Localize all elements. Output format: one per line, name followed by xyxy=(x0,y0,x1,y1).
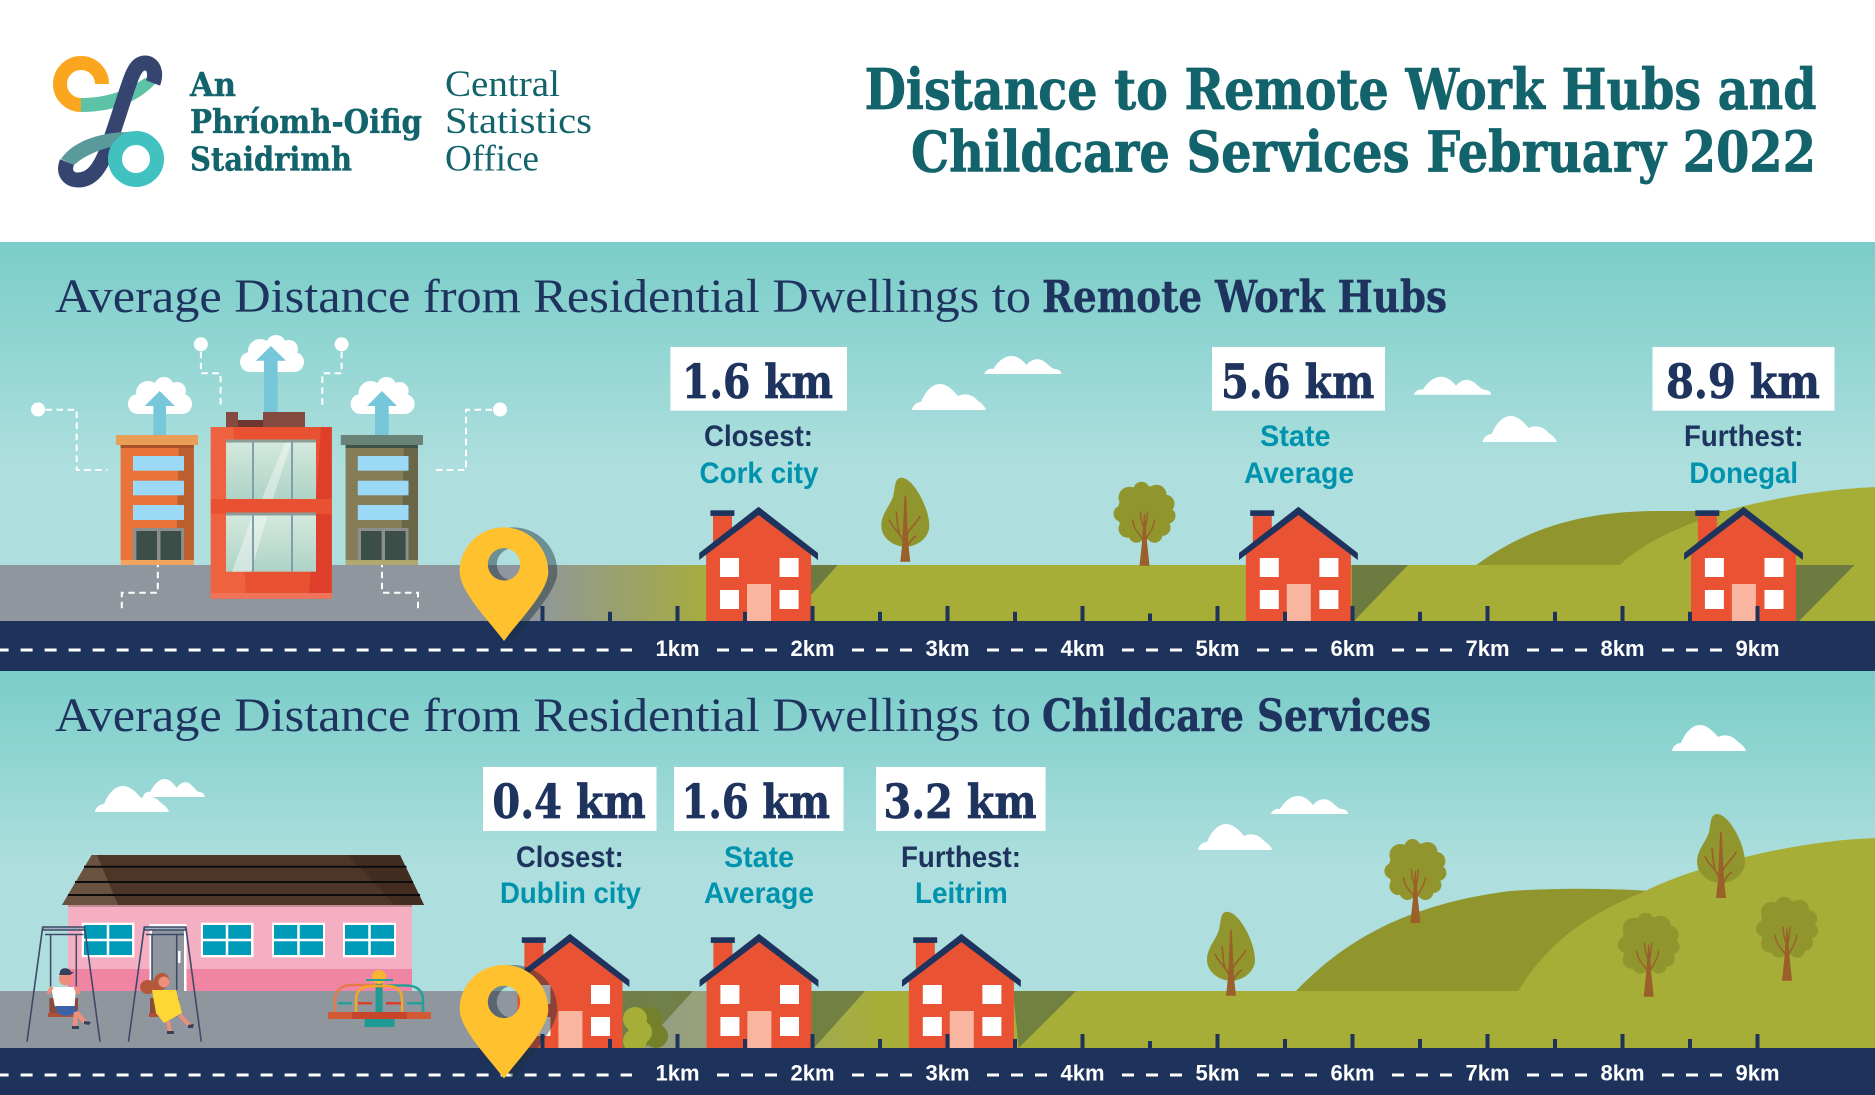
road: 7km xyxy=(1465,1060,1510,1086)
house: furthest, Leitrim xyxy=(902,934,1021,1048)
road: 8km xyxy=(1600,636,1645,661)
callout: 8.9 km furthest: Furthest: xyxy=(1684,420,1804,453)
bush xyxy=(623,1007,668,1053)
hills xyxy=(1475,487,1875,567)
logo text: English name: Statistics xyxy=(445,101,592,142)
road: 6km xyxy=(1330,636,1375,661)
callout: 5.6 km state average: State xyxy=(1260,420,1331,453)
callout: 8.9 km furthest xyxy=(1652,347,1834,490)
sky background xyxy=(0,242,1875,671)
logo text: Irish name xyxy=(189,65,422,179)
road: 5km xyxy=(1195,1060,1240,1086)
clouds xyxy=(95,725,1746,850)
clouds xyxy=(912,356,1557,442)
callout: 1.6 km state average xyxy=(674,767,844,910)
road: 3km xyxy=(925,636,970,661)
road: 1km xyxy=(655,636,700,661)
logo text: Irish name: Phríomh-Oifig xyxy=(190,102,422,141)
logo text: English name: Central xyxy=(445,64,560,105)
childcare building xyxy=(62,855,424,991)
swing with boy xyxy=(27,927,100,1042)
road xyxy=(0,1034,1875,1095)
callout: 1.6 km state average: Average xyxy=(704,877,814,910)
sky background xyxy=(0,671,1875,1095)
house shadows xyxy=(622,991,1076,1048)
panel: remote work hubs xyxy=(0,242,1875,671)
heading: Average Distance from Residential Dwellings to xyxy=(55,689,1031,742)
heading: Remote Work Hubs xyxy=(1042,272,1447,323)
heading xyxy=(55,689,1431,742)
road: 9km xyxy=(1735,1060,1780,1086)
road: 2km xyxy=(790,1060,835,1086)
road: 9km xyxy=(1735,636,1780,661)
house: closest, Dublin city xyxy=(511,934,629,1048)
heading: Childcare Services xyxy=(1042,691,1431,742)
building: olive office xyxy=(341,377,423,565)
road: 3km xyxy=(925,1060,970,1086)
connector lines xyxy=(31,337,507,612)
road: 4km xyxy=(1060,636,1105,661)
callout: 3.2 km furthest: 3.2 km xyxy=(884,775,1036,830)
road: 5km xyxy=(1195,636,1240,661)
callout: 1.6 km closest xyxy=(670,347,847,490)
house: state average xyxy=(1239,507,1358,621)
callout: 5.6 km state average: Average xyxy=(1244,457,1354,490)
callout: 1.6 km closest: Closest: xyxy=(704,420,813,453)
ground xyxy=(0,991,1875,1048)
roundabout xyxy=(328,970,431,1027)
logo text: English name xyxy=(445,64,592,180)
callout: 1.6 km closest: Cork city xyxy=(700,457,819,490)
callout: 1.6 km state average: 1.6 km xyxy=(682,775,830,830)
callout: 0.4 km closest: Closest: xyxy=(516,841,624,874)
logo xyxy=(60,63,592,180)
hills xyxy=(1295,838,1875,992)
road: 4km xyxy=(1060,1060,1105,1086)
map pin xyxy=(460,527,557,641)
heading: Average Distance from Residential Dwellings to xyxy=(55,270,1031,323)
logo text: Irish name: Staidrimh xyxy=(190,140,352,179)
road xyxy=(0,606,1875,671)
callout: 0.4 km closest xyxy=(483,767,656,910)
ground xyxy=(0,565,1875,621)
map pin xyxy=(460,965,557,1079)
house: closest, Cork city xyxy=(699,507,818,621)
road: 2km xyxy=(790,636,835,661)
building: red tower xyxy=(211,335,332,599)
building: orange office xyxy=(116,377,198,565)
callout: 8.9 km furthest: 8.9 km xyxy=(1666,355,1820,410)
callout: 8.9 km furthest: Donegal xyxy=(1689,457,1798,490)
title xyxy=(865,57,1817,186)
road: 6km xyxy=(1330,1060,1375,1086)
callout: 3.2 km furthest xyxy=(876,767,1046,910)
house: state average xyxy=(700,934,818,1048)
road: 1km xyxy=(655,1060,700,1086)
house shadows xyxy=(811,565,1854,621)
logo text: Irish name: An xyxy=(189,65,236,104)
trees xyxy=(881,478,1176,566)
callout: 0.4 km closest: 0.4 km xyxy=(492,775,646,830)
logo mark xyxy=(60,63,157,180)
callout: 0.4 km closest: Dublin city xyxy=(500,877,641,910)
callout: 5.6 km state average xyxy=(1212,347,1385,490)
callout: 1.6 km closest: 1.6 km xyxy=(682,355,833,410)
callout: 3.2 km furthest: Furthest: xyxy=(901,841,1021,874)
trees xyxy=(1207,814,1818,997)
header background xyxy=(0,0,1875,242)
swing with girl xyxy=(128,927,201,1042)
road: 7km xyxy=(1465,636,1510,661)
callout: 1.6 km state average: State xyxy=(724,841,794,874)
panel: childcare services xyxy=(0,671,1875,1095)
callout: 5.6 km state average: 5.6 km xyxy=(1221,355,1374,410)
heading xyxy=(55,270,1447,323)
logo text: English name: Office xyxy=(445,139,539,180)
house: furthest, Donegal xyxy=(1684,507,1803,621)
callout: 3.2 km furthest: Leitrim xyxy=(915,877,1008,910)
road: 8km xyxy=(1600,1060,1645,1086)
